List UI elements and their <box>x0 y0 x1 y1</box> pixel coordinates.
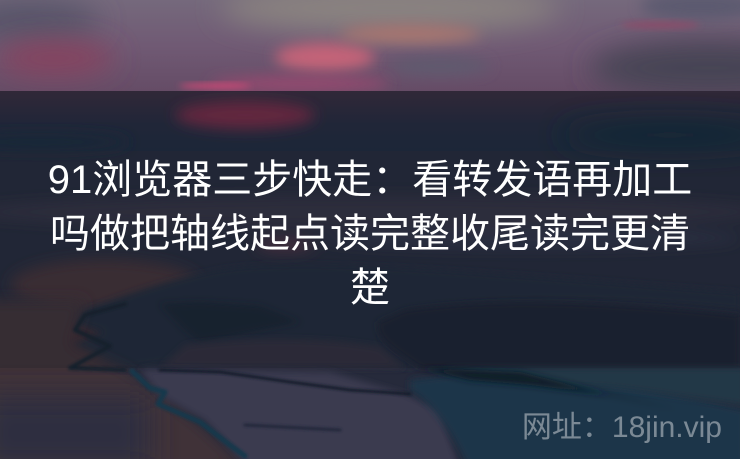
shoreline <box>70 304 410 456</box>
title: 91浏览器三步快走：看转发语再加工吗做把轴线起点读完整收尾读完更清楚 <box>48 158 692 310</box>
distant water texture <box>10 200 730 342</box>
wet sand <box>140 369 460 459</box>
dark wave near centre <box>77 275 202 355</box>
right dark water <box>381 305 736 334</box>
dark overlay band <box>0 91 740 368</box>
sky <box>0 0 740 96</box>
watermark: 网址：18jin.vip <box>522 411 722 444</box>
mid sand strip <box>160 339 405 368</box>
foam water <box>410 372 740 459</box>
left sand <box>0 300 250 459</box>
